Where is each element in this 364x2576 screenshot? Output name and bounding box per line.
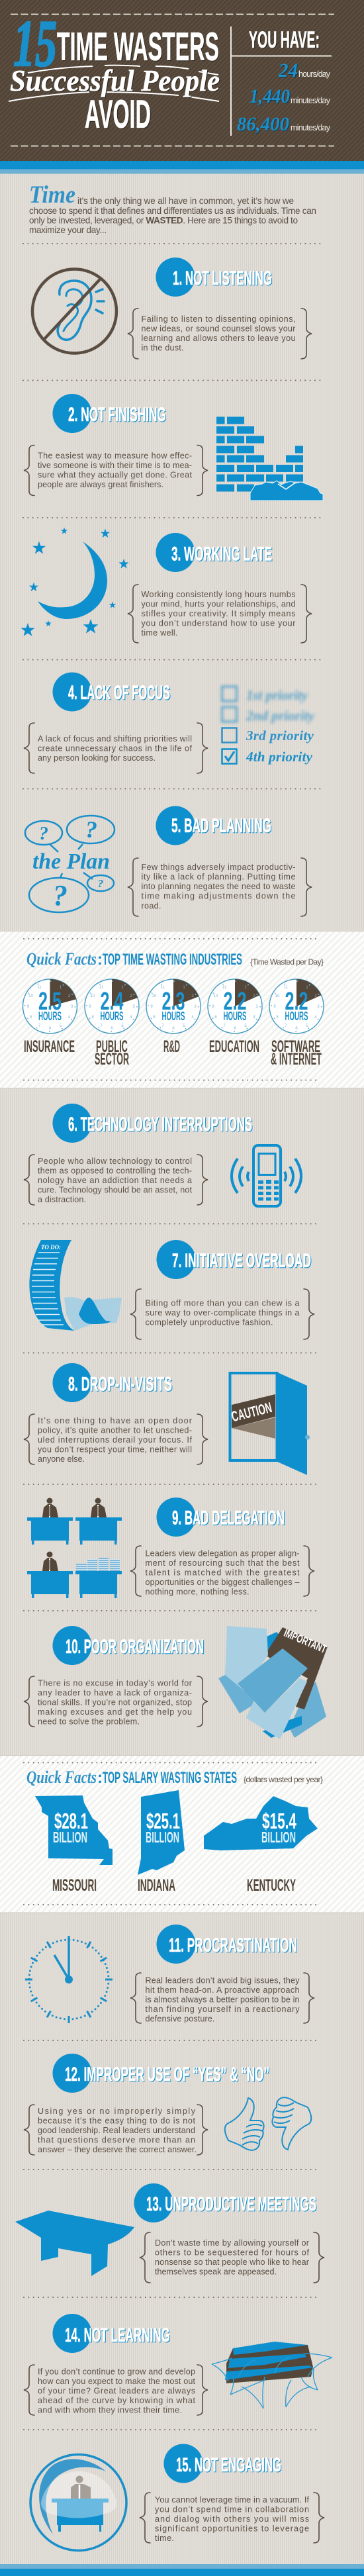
- clock: public sector: 1: [121, 986, 124, 990]
- clock: public sector: 5: [121, 1024, 124, 1028]
- text block: [24, 1155, 208, 1205]
- clock: software and internet: 4: [314, 1016, 317, 1020]
- heading: [53, 394, 166, 433]
- icon: the plan with question bubbles: ?: [98, 877, 103, 890]
- clock: r&d: 3: [194, 1005, 197, 1009]
- text block: you don’t understand how to use your: [142, 618, 295, 628]
- clock: education: 11: [222, 986, 227, 990]
- text block: how can you expect to make the most out: [38, 2377, 196, 2386]
- icon: meeting table: [15, 2211, 134, 2276]
- clock: public sector: 6: [111, 1027, 113, 1031]
- panel: 10. poor organization: [24, 1626, 329, 1739]
- text block: [128, 585, 312, 643]
- you have panel: 1,440: [250, 85, 290, 107]
- panel: 9. bad delegation: [27, 1498, 314, 1598]
- icon: dusty books with cobwebs: [212, 2342, 332, 2409]
- panel: 8. drop-in-visits: [24, 1363, 310, 1475]
- clock: education: [208, 979, 262, 1033]
- title: 15: [13, 7, 57, 80]
- panel: 3. working late: [21, 527, 312, 643]
- heading: [156, 533, 272, 572]
- clock: insurance: 7: [38, 1024, 41, 1028]
- quick facts heading: Quick Facts: [26, 949, 97, 969]
- clock: education: 5: [244, 1024, 247, 1028]
- clock: insurance: 1: [60, 986, 62, 990]
- clock: insurance: 8: [30, 1016, 32, 1020]
- heading: 1. NOT LISTENING: [173, 267, 272, 289]
- clock: education: 7: [223, 1024, 226, 1028]
- text block: any person looking for success.: [38, 753, 156, 763]
- clock: insurance: 10: [28, 994, 33, 998]
- title: TIME WASTERS: [57, 24, 219, 69]
- icon: thumbs up and down: [225, 2097, 311, 2150]
- quick facts heading: :: [97, 1769, 103, 1787]
- clock: public sector: 8: [91, 1016, 94, 1020]
- clock: public sector: HOURS: [101, 1010, 123, 1023]
- icon: the plan with question bubbles: ?: [85, 816, 97, 843]
- you have panel: hours/day: [298, 70, 331, 79]
- panel: 1. not listening: [32, 258, 312, 359]
- text block: policy, it’s quite another to let unsched-: [38, 1426, 192, 1435]
- heading: [53, 2314, 170, 2353]
- text block: [24, 445, 208, 495]
- clock: insurance: 3: [71, 1005, 73, 1009]
- quick facts heading: :: [97, 951, 103, 969]
- text block: ahead of the curve by knowing in what: [38, 2396, 196, 2405]
- panel: 2. not finishing: [24, 394, 323, 501]
- text block: Leaders view delegation as proper align-: [146, 1549, 299, 1558]
- clock: public sector: 11: [99, 986, 104, 990]
- text block: Few things adversely impact productiv-: [142, 863, 295, 872]
- text block: is almost always a better position to be in: [146, 1995, 299, 2005]
- heading: [53, 1104, 252, 1143]
- text block: need to solve the problem.: [38, 1717, 140, 1727]
- you have panel: 86,400: [237, 113, 289, 135]
- panel: header: [0, 0, 364, 173]
- map: indiana: BILLION: [146, 1829, 179, 1846]
- clock: insurance: 4: [68, 1016, 71, 1020]
- intro text block: [29, 181, 316, 235]
- text block: ity like a lack of planning. Putting time: [142, 873, 295, 882]
- map: indiana: INDIANA: [138, 1876, 175, 1895]
- text block: anyone else.: [38, 1455, 85, 1464]
- heading: 8. DROP-IN-VISITS: [68, 1373, 172, 1396]
- clock: education: 6: [234, 1027, 236, 1031]
- map: indiana: $25.1: [146, 1809, 180, 1833]
- clock: r&d: HOURS: [161, 1010, 185, 1023]
- intro text block: maximize your day...: [29, 225, 107, 235]
- quick facts heading: {dollars wasted per year}: [244, 1775, 323, 1784]
- clock: education: 3: [255, 1005, 258, 1009]
- heading: [156, 1925, 297, 1964]
- icon: priority checklist: 3rd priority: [246, 728, 314, 743]
- text block: of your time? Great leaders are always: [38, 2386, 195, 2395]
- intro text block: choose to spend it that defines and differentiates us as individuals. Time can: [29, 206, 316, 216]
- panel: 7. initiative overload: [29, 1240, 314, 1339]
- clock: public sector: 10: [91, 994, 95, 998]
- text block: that questions deserve more than an: [38, 2136, 195, 2145]
- text block: [24, 2105, 208, 2155]
- clock: public sector: 2: [130, 994, 132, 998]
- heading: 4. LACK OF FOCUS: [68, 682, 170, 704]
- industry labels: INSURANCE: [24, 1037, 75, 1056]
- text block: in the dust.: [142, 343, 184, 352]
- text block: create unnecessary chaos in the life of: [38, 744, 192, 753]
- text block: It’s one thing to have an open door: [38, 1416, 192, 1425]
- intro text block: Time: [29, 181, 75, 209]
- clock: public sector: 4: [130, 1016, 132, 1020]
- clock: insurance: 2.5: [38, 988, 62, 1016]
- clock: insurance: 5: [60, 1024, 62, 1028]
- text block: [130, 1546, 314, 1597]
- heading: [156, 1498, 285, 1537]
- you have panel: [230, 26, 332, 136]
- text block: hit them head-on. A proactive approach: [146, 1985, 299, 1995]
- text block: Real leaders don’t avoid big issues, they: [146, 1976, 300, 1985]
- you have panel: 24: [278, 60, 298, 81]
- clock: r&d: 1: [183, 986, 185, 990]
- heading: [53, 1363, 172, 1402]
- text block: good leadership. Real leaders understand: [38, 2126, 195, 2135]
- text block: time making adjustments down the: [142, 891, 295, 900]
- icon: unfinished brick wall: [216, 417, 323, 501]
- text block: tional skills. If you’re not organized, stop: [38, 1697, 192, 1707]
- clock: software and internet: 2: [314, 994, 317, 998]
- text block: significant opportunities to leverage: [155, 2524, 309, 2533]
- clock: public sector: 7: [100, 1024, 103, 1028]
- clock: insurance: 11: [37, 986, 42, 990]
- text block: [140, 2232, 324, 2283]
- text block: People who allow technology to control: [38, 1157, 192, 1166]
- text block: and dialog with others you will miss: [155, 2514, 309, 2524]
- clock: insurance: 9: [27, 1005, 30, 1009]
- clock: software and internet: 6: [295, 1027, 298, 1031]
- clock: insurance: 2: [68, 994, 71, 998]
- heading: [53, 2054, 269, 2093]
- clock: insurance: HOURS: [38, 1010, 62, 1023]
- industry labels: SOFTWARE: [271, 1037, 320, 1056]
- intro text block: only be invested, leveraged, or WASTED. Here are 15 things to avoid to: [29, 216, 298, 225]
- clock: r&d: 2.3: [161, 988, 185, 1016]
- text block: uled interruptions derail your focus. If: [38, 1435, 192, 1445]
- text block: road.: [142, 902, 161, 911]
- map: missouri: $28.1: [54, 1809, 88, 1833]
- icon: isolated person in a glass vacuum: [30, 2455, 126, 2550]
- panel: 5. bad planning: [25, 806, 312, 916]
- clock: software and internet: 10: [275, 994, 280, 998]
- map: kentucky: [204, 1796, 318, 1895]
- heading: [134, 2183, 316, 2222]
- heading: 15. NOT ENGAGING: [176, 2454, 281, 2476]
- heading: [156, 1240, 311, 1279]
- title: AVOID: [85, 92, 151, 136]
- intro text block: it’s the only thing we all have in common, yet it’s how we: [77, 196, 294, 206]
- icon: long to-do list: [29, 1240, 122, 1331]
- map: kentucky: BILLION: [261, 1829, 296, 1846]
- text block: ment of resourcing such that the best: [146, 1558, 300, 1568]
- text block: defensive posture.: [146, 2014, 214, 2023]
- heading: 14. NOT LEARNING: [65, 2324, 170, 2346]
- clock: education: HOURS: [224, 1010, 246, 1023]
- heading: 5. BAD PLANNING: [171, 815, 271, 837]
- icon: dotted clock: [25, 1936, 113, 2023]
- text block: Failing to listen to dissenting opinions,: [142, 314, 295, 324]
- clock: education: 2: [253, 994, 255, 998]
- text block: themselves speak are appeased.: [155, 2267, 277, 2276]
- text block: you don’t spend time in collaboration: [155, 2505, 309, 2514]
- map: indiana: [138, 1790, 185, 1895]
- clock: r&d: 4: [191, 1016, 194, 1020]
- panel: quick facts industries: [0, 931, 364, 1088]
- panel: 11. procrastination: [25, 1925, 314, 2023]
- heading: [164, 2444, 281, 2483]
- text block: A lack of focus and shifting priorities will: [38, 734, 192, 743]
- quick facts heading: [26, 949, 324, 969]
- text block: because it’s the easy thing to do is not: [38, 2116, 196, 2125]
- title: Successful People: [10, 64, 220, 97]
- quick facts heading: TOP SALARY WASTING STATES: [103, 1769, 237, 1787]
- clock: r&d: 6: [172, 1027, 175, 1031]
- text block: [130, 1289, 314, 1339]
- clock: public sector: 2.4: [101, 988, 123, 1016]
- panel: 6. technology interruptions: [24, 1104, 301, 1206]
- clock: public sector: 9: [89, 1005, 91, 1009]
- footer band: [0, 2564, 364, 2576]
- industry labels: PUBLIC: [96, 1037, 128, 1056]
- text block: than finding yourself in a reactionary: [146, 2005, 300, 2014]
- quick facts heading: {Time Wasted per Day}: [250, 957, 324, 967]
- text block: your mind, hurts your relationships, and: [142, 600, 295, 609]
- icon: moon and stars: [21, 527, 129, 636]
- text block: [24, 1676, 208, 1727]
- heading: [53, 673, 170, 711]
- icon: desks with overloaded worker: [27, 1498, 122, 1598]
- quick facts heading: Quick Facts: [26, 1768, 97, 1787]
- panel: 12. improper use of yes and no: [24, 2054, 311, 2155]
- clock: education: 8: [214, 1016, 217, 1020]
- text block: sure way to over-complicate things in a: [146, 1308, 299, 1317]
- text block: answer – they deserve the correct answer.: [38, 2145, 197, 2154]
- map: kentucky: $15.4: [262, 1809, 296, 1833]
- text block: [130, 1973, 314, 2023]
- icon: the plan with question bubbles: the Plan: [32, 849, 110, 874]
- text block: The easiest way to measure how effec-: [38, 452, 192, 461]
- text block: [24, 1414, 208, 1464]
- text block: [24, 2365, 208, 2415]
- clock: insurance: [23, 979, 77, 1033]
- icon: priority checklist: 4th priority: [246, 749, 313, 765]
- text block: completely unproductive fashion.: [146, 1317, 273, 1327]
- text block: them as opposed to controlling the tech-: [38, 1167, 192, 1176]
- you have panel: minutes/day: [291, 123, 331, 132]
- icon: priority checklist: 2nd priority: [246, 708, 315, 724]
- text block: nonsense so that people who like to hear: [155, 2258, 309, 2267]
- text block: a distraction.: [38, 1195, 86, 1204]
- clock: r&d: 11: [161, 986, 165, 990]
- industry labels: [24, 1037, 322, 1069]
- icon: crossed-out ear: [32, 269, 116, 354]
- clock: education: 2.2: [224, 988, 246, 1016]
- icon: the plan with question bubbles: ?: [53, 879, 68, 912]
- text block: time.: [155, 2534, 174, 2543]
- text block: people are always great finishers.: [38, 480, 163, 489]
- clock: public sector: 3: [132, 1005, 135, 1009]
- clock: r&d: 9: [150, 1005, 153, 1009]
- text block: nology have an addiction that needs a: [38, 1176, 192, 1185]
- clock: education: 4: [253, 1016, 255, 1020]
- clock: education: 1: [244, 986, 247, 990]
- text block: cure. Technology should be an asset, not: [38, 1185, 192, 1194]
- clock: software and internet: 11: [284, 986, 289, 990]
- quick facts heading: [26, 1768, 323, 1787]
- text block: you don’t respect your time, neither will: [38, 1445, 192, 1454]
- text block: Don’t waste time by allowing yourself or: [155, 2238, 309, 2248]
- clock: software and internet: 1: [306, 986, 308, 990]
- text block: others to be sequestered for hours of: [155, 2248, 310, 2258]
- title: [9, 7, 220, 136]
- icon: open door with caution tape: CAUTION: [230, 1399, 273, 1425]
- heading: 2. NOT FINISHING: [68, 404, 166, 426]
- clock: software and internet: 9: [273, 1005, 276, 1009]
- clock: software and internet: 8: [276, 1016, 279, 1020]
- text block: talent is matched with the greatest: [146, 1568, 300, 1577]
- clock: software and internet: 5: [306, 1024, 308, 1028]
- text block: learning and allows others to leave you: [142, 334, 295, 343]
- text block: sure what they actually get done. Great: [38, 470, 192, 479]
- heading: [156, 258, 272, 297]
- clock: software and internet: 7: [285, 1024, 287, 1028]
- text block: Working consistently long hours numbs: [142, 590, 295, 599]
- clock: software and internet: HOURS: [285, 1010, 308, 1023]
- text block: Biting off more than you can chew is a: [146, 1299, 299, 1308]
- industry labels: EDUCATION: [209, 1037, 259, 1056]
- heading: 3. WORKING LATE: [171, 543, 272, 565]
- text block: [24, 723, 208, 773]
- quick facts heading: TOP TIME WASTING INDUSTRIES: [103, 951, 242, 969]
- clock: r&d: 10: [152, 994, 157, 998]
- industry labels: R&D: [163, 1037, 180, 1056]
- text block: making excuses and get the help you: [38, 1707, 192, 1717]
- text block: time well.: [142, 628, 177, 638]
- text block: opportunities or the biggest challenges –: [146, 1578, 299, 1587]
- text block: [128, 309, 312, 359]
- clock: education: 10: [214, 994, 218, 998]
- text block: stifles your creativity. It simply means: [142, 609, 295, 618]
- clock: r&d: 2: [191, 994, 194, 998]
- icon: the plan with question bubbles: [25, 816, 114, 912]
- clock: public sector: [85, 979, 139, 1033]
- clock: education: 9: [212, 1005, 214, 1009]
- text block: There is no excuse in today’s world for: [38, 1679, 192, 1688]
- panel: 15. not engaging: [30, 2444, 324, 2550]
- clock: insurance: 6: [49, 1027, 52, 1031]
- clock: software and internet: [269, 979, 324, 1033]
- icon: long to-do list: TO DO:: [41, 1244, 61, 1251]
- clock: software and internet: 2.2: [285, 988, 308, 1016]
- panel: 14. not learning: [24, 2314, 332, 2415]
- map: kentucky: KENTUCKY: [247, 1876, 296, 1895]
- text block: any leader to have a lack of organiza-: [38, 1688, 192, 1697]
- text block: into planning negates the need to waste: [142, 882, 295, 891]
- icon: messy papers: [218, 1626, 329, 1739]
- text block: [128, 858, 312, 916]
- heading: [53, 1626, 204, 1665]
- icon: priority checklist: 1st priority: [246, 687, 308, 703]
- map: missouri: BILLION: [53, 1829, 87, 1846]
- text block: and with whom they invest their time.: [38, 2406, 182, 2415]
- icon: open door with caution tape: [230, 1372, 310, 1475]
- panel: 13. unproductive meetings: [15, 2183, 324, 2283]
- map: missouri: MISSOURI: [52, 1876, 97, 1895]
- you have panel: minutes/day: [291, 96, 331, 105]
- industry labels: SECTOR: [95, 1050, 129, 1069]
- text block: tive someone is with their time is to mea-: [38, 461, 192, 470]
- clock: r&d: 8: [153, 1016, 156, 1020]
- panel: 4. lack of focus: [24, 673, 315, 773]
- text block: Using yes or no improperly simply: [38, 2107, 196, 2116]
- clock: r&d: 5: [183, 1024, 185, 1028]
- text block: If you don’t continue to grow and develop: [38, 2367, 195, 2377]
- icon: priority checklist: [222, 687, 315, 765]
- icon: messy papers: IMPORTANT: [282, 1627, 329, 1656]
- clock: r&d: 7: [161, 1024, 164, 1028]
- clock: r&d: [146, 979, 201, 1033]
- text block: You cannot leverage time in a vacuum. If: [155, 2495, 310, 2504]
- heading: [156, 806, 271, 845]
- panel: quick facts states: [0, 1755, 364, 1913]
- heading: 10. POOR ORGANIZATION: [66, 1636, 204, 1658]
- text block: [140, 2493, 324, 2543]
- text block: nothing more, nothing less.: [146, 1588, 249, 1597]
- clock: software and internet: 3: [317, 1005, 320, 1009]
- icon: ringing phone: [232, 1145, 301, 1206]
- icon: the plan with question bubbles: ?: [39, 824, 48, 844]
- text block: new ideas, or sound counsel slows your: [142, 324, 295, 334]
- map: missouri: [35, 1795, 113, 1895]
